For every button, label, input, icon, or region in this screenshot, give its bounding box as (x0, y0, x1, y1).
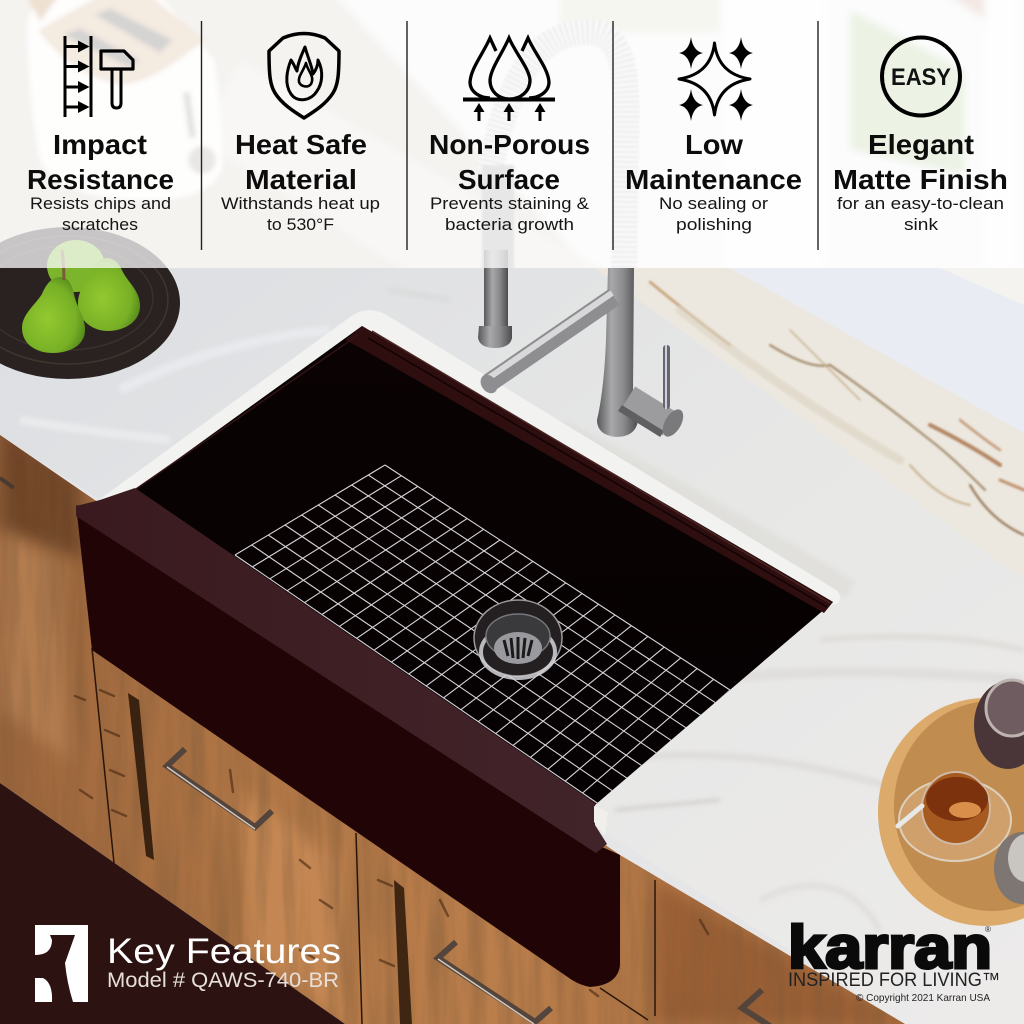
door grain strokes (75, 690, 708, 996)
feature 1: impact resistance (27, 36, 174, 234)
faucet (477, 250, 687, 440)
model number: Model # QAWS-740-BR (107, 969, 339, 992)
left pear (22, 277, 85, 353)
tagline: INSPIRED FOR LIVING™ (788, 970, 1000, 991)
spoon (898, 806, 922, 826)
copyright: © Copyright 2021 Karran USA (856, 992, 990, 1004)
cabinet handle right (742, 990, 770, 1024)
feature 2: heat safe (221, 34, 380, 234)
pear stem (62, 250, 64, 280)
feature 5: matte finish (833, 38, 1008, 234)
sink (76, 310, 840, 987)
mixer lever (663, 345, 670, 409)
description: sink (904, 216, 939, 234)
icon: shield with flame (269, 34, 339, 118)
description: to 530°F (267, 216, 334, 234)
marble backsplash (595, 268, 1024, 580)
description: scratches (62, 216, 138, 234)
door recesses (128, 693, 154, 860)
feature 3: non-porous (429, 38, 590, 234)
footer: karran logo (788, 914, 1000, 1004)
cabinet handle left (167, 749, 272, 829)
cabinet handle center (438, 942, 551, 1024)
top rim of apron (76, 488, 607, 853)
heading: Surface (458, 164, 560, 195)
icon: Karran K mark (35, 925, 88, 1002)
spout tip (477, 372, 501, 396)
back pear (47, 240, 105, 292)
wood cabinetry (0, 425, 910, 1024)
heading: Heat Safe (235, 129, 367, 160)
tea tray (878, 680, 1024, 926)
apron front (76, 505, 620, 987)
teapot (974, 681, 1024, 769)
footer: key features (35, 925, 341, 1002)
registered mark: ® (985, 925, 991, 934)
tea surface (926, 777, 988, 821)
drain strainer (474, 600, 562, 678)
sprayer base (478, 326, 512, 348)
description: polishing (676, 216, 752, 234)
tray inner (894, 701, 1024, 911)
sprayer body (484, 250, 508, 328)
heading: Material (245, 164, 357, 195)
icon: wall and hammer (65, 36, 133, 117)
countertop marble veining (20, 290, 1024, 930)
window sill (730, 268, 1024, 433)
tray rim (878, 698, 1024, 926)
chrome spring faucet neck (482, 32, 626, 280)
wood grain texture (0, 497, 884, 1024)
heading: Matte Finish (833, 164, 1008, 195)
back ledge (345, 326, 833, 613)
backsplash veins (650, 282, 1024, 535)
upper wall and window backdrop (0, 0, 1024, 280)
plate (0, 227, 180, 379)
teacup (922, 772, 990, 844)
stainless wire grid (235, 465, 730, 805)
heading: Low (685, 129, 743, 160)
faucet post (597, 268, 638, 437)
cabinet handle far left (0, 478, 14, 488)
feature 4: low maintenance (625, 37, 802, 234)
title: Key Features (107, 932, 341, 971)
toaster (26, 0, 222, 201)
heading: Impact (53, 129, 147, 160)
description: bacteria growth (445, 216, 574, 234)
description: Prevents staining & (430, 195, 589, 213)
icon: water drops and arrows (463, 38, 555, 121)
ledge lines (136, 331, 830, 607)
description: for an easy-to-clean (837, 195, 1004, 213)
wordmark: karran (788, 914, 992, 981)
description: No sealing or (659, 195, 769, 213)
mixer handle (620, 398, 687, 440)
heading: Elegant (868, 129, 974, 160)
bowl of pears (0, 227, 180, 379)
cabinet seams (92, 648, 655, 1024)
icon: easy badge: EASY (891, 64, 951, 91)
glass jar (994, 832, 1024, 904)
soft wood tone patches (0, 425, 905, 1024)
translucent features band (0, 0, 1024, 268)
sink basin interior (135, 326, 833, 805)
icon: sparkles (679, 37, 753, 121)
marble countertop (0, 268, 1024, 1024)
heading: Maintenance (625, 164, 802, 195)
window sill edge (940, 268, 1024, 305)
icon: easy badge (882, 38, 960, 116)
dark hardwood floor (0, 783, 345, 1024)
white counter bevel (100, 310, 840, 606)
heading: Non-Porous (429, 129, 590, 160)
spout arm (487, 293, 614, 383)
description: Withstands heat up (221, 195, 380, 213)
heading: Resistance (27, 164, 174, 195)
description: Resists chips and (30, 195, 171, 213)
saucer (899, 779, 1011, 861)
countertop right piece edge (594, 806, 608, 836)
right pear (78, 258, 140, 331)
